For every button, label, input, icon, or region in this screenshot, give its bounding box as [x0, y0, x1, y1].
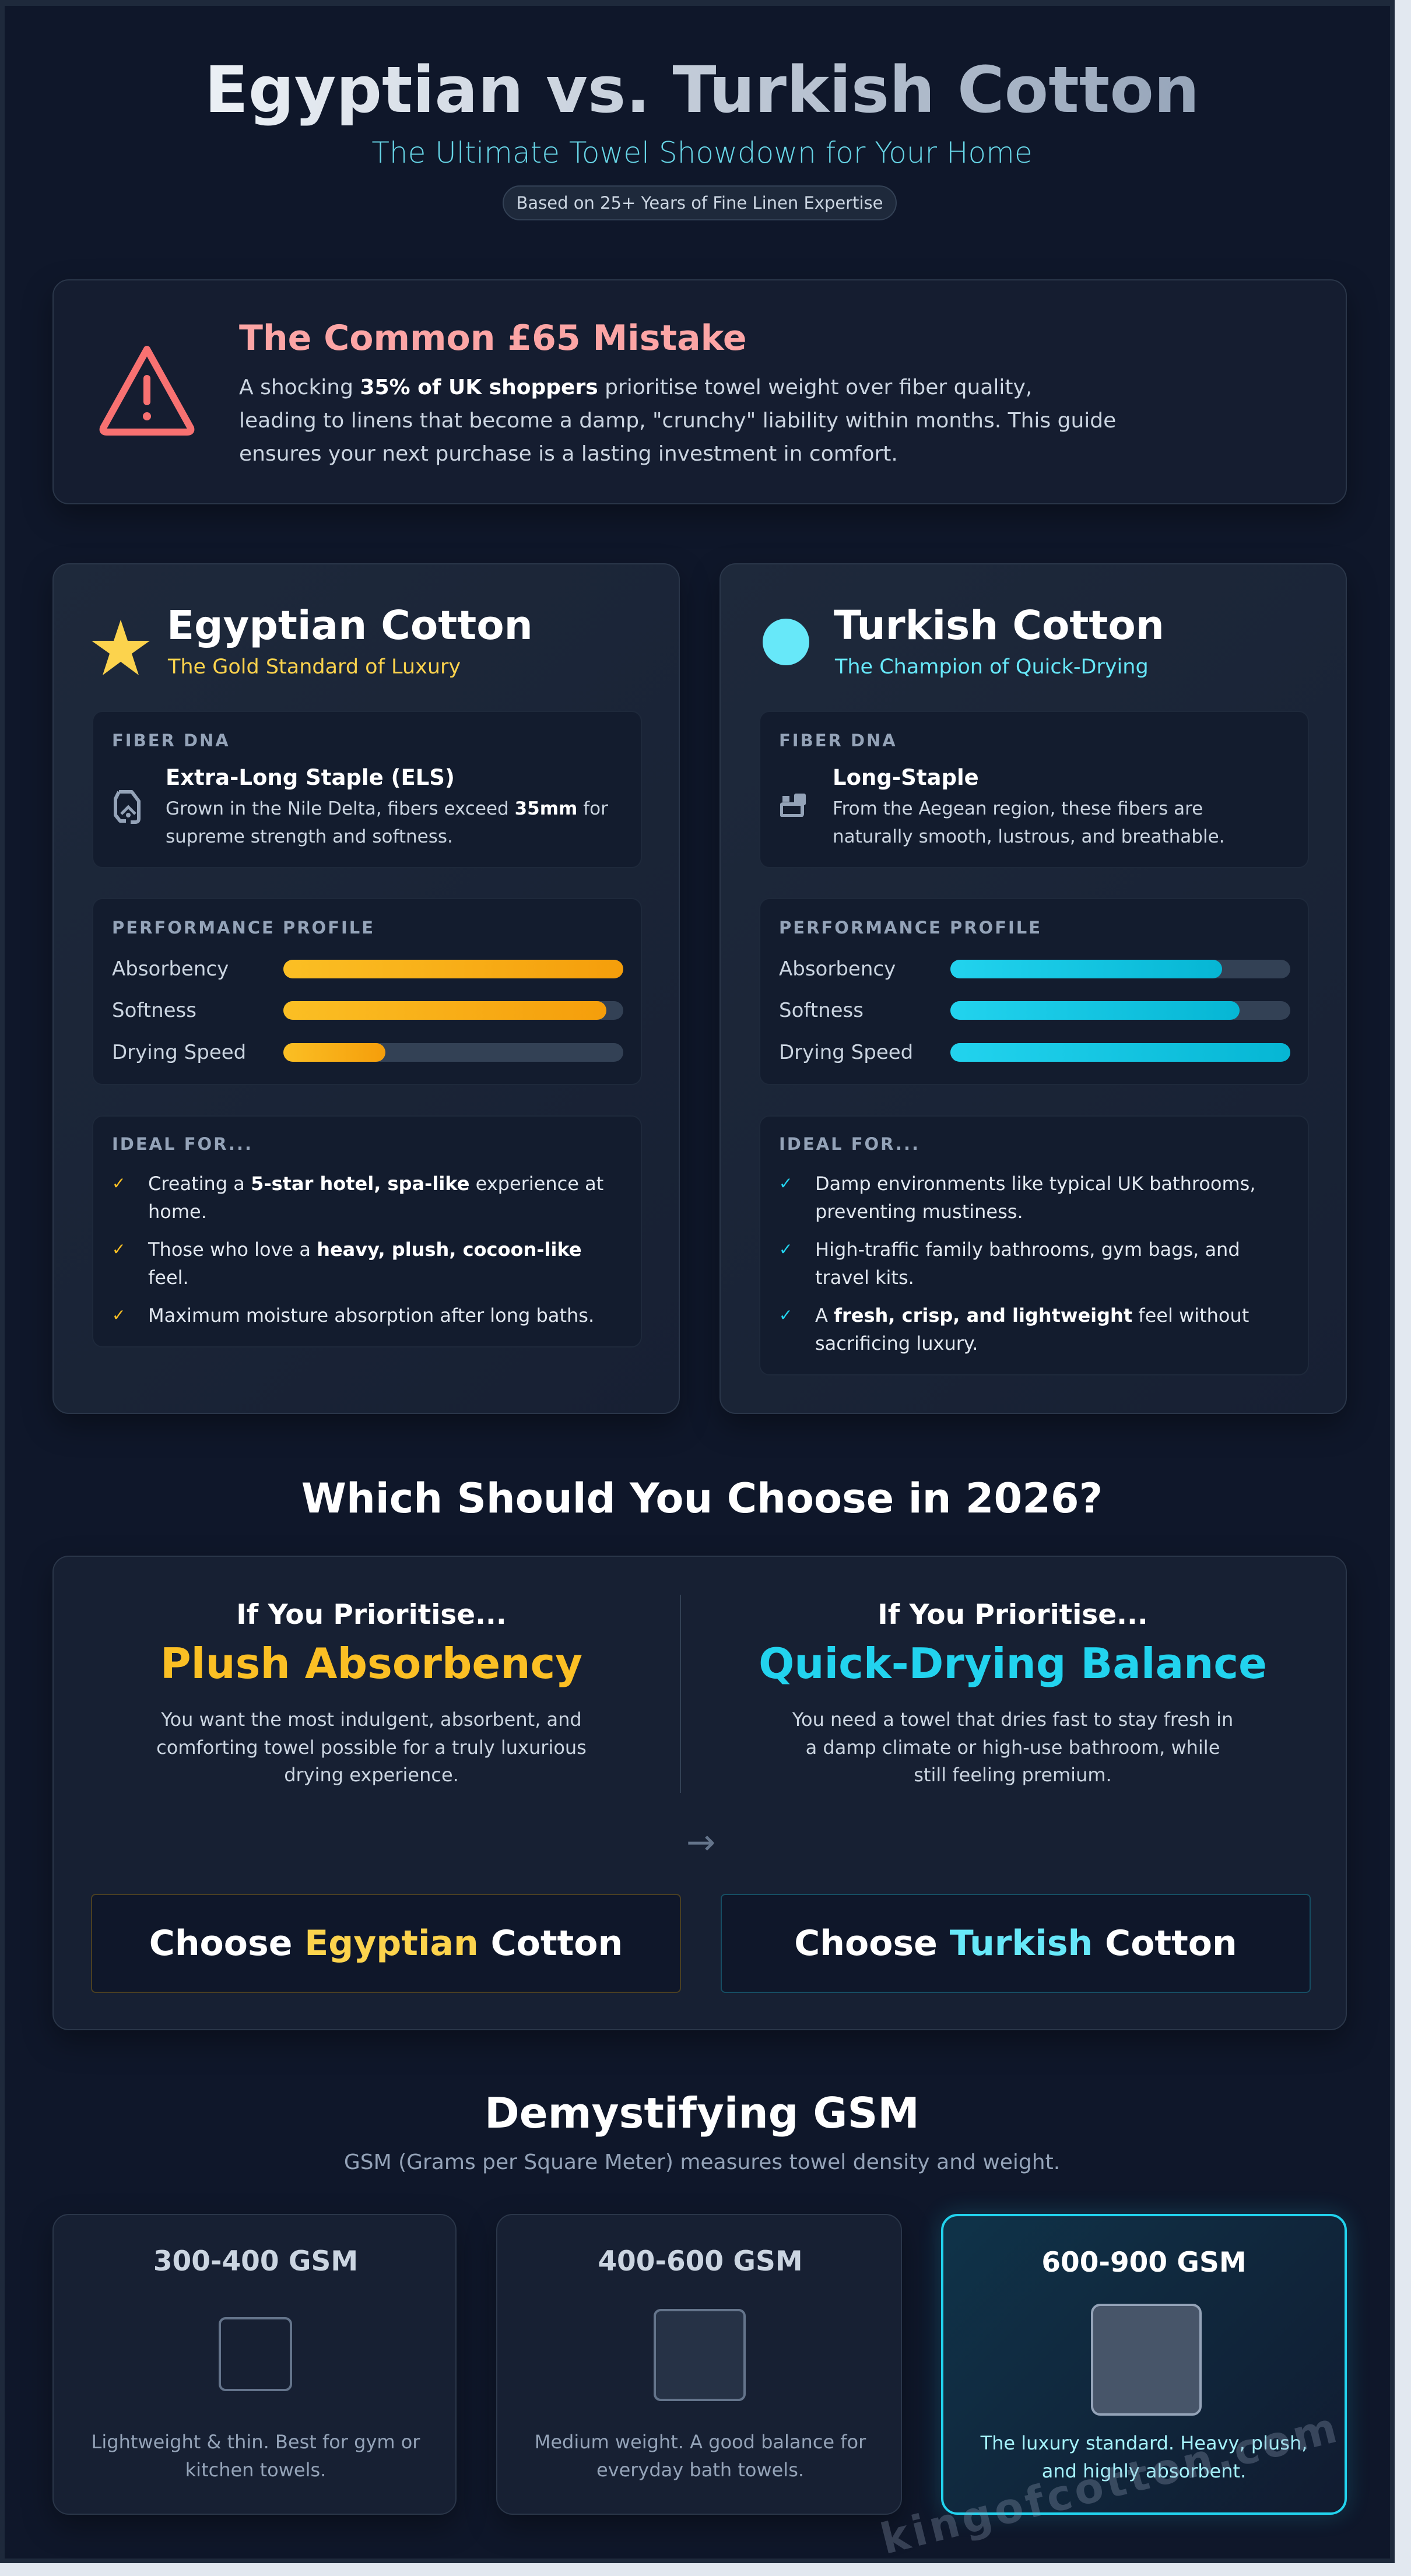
- watermark: kingofcotton.com: [876, 2402, 1345, 2564]
- ideal for list: Damp environments like typical UK bathrooms, preventing mustiness.: [815, 1173, 1255, 1223]
- body text: ensures your next purchase is a lasting investment in comfort.: [239, 442, 898, 466]
- heading: The Common £65 Mistake: [239, 318, 747, 359]
- subtitle: The Ultimate Towel Showdown for Your Home: [371, 136, 1033, 170]
- fiber DNA box: FIBER DNA: [779, 731, 897, 750]
- fiber DNA box: From the Aegean region, these fibers are: [833, 798, 1203, 819]
- ideal for list: ✓: [112, 1305, 125, 1325]
- title: Egyptian vs. Turkish Cotton: [205, 52, 1199, 127]
- icon: fiber: [114, 790, 141, 824]
- fiber DNA box: naturally smooth, lustrous, and breathable.: [833, 826, 1225, 847]
- fiber DNA box: [92, 711, 642, 868]
- ideal for list: Those who love a heavy, plush, cocoon-like feel.: [148, 1238, 582, 1289]
- button: Turkish: Choose Turkish Cotton: [794, 1923, 1237, 1964]
- ideal for list: IDEAL FOR...: [112, 1134, 253, 1154]
- right option: still feeling premium.: [914, 1764, 1112, 1786]
- performance bars: Drying Speed: [779, 1041, 913, 1064]
- ideal for list: ✓: [112, 1174, 125, 1193]
- right option: a damp climate or high-use bathroom, while: [806, 1736, 1220, 1759]
- performance bars: Softness: [779, 999, 864, 1022]
- body text: A shocking 35% of UK shoppers prioritise towel weight over fiber quality,: [239, 375, 1032, 399]
- badge: Based on 25+ Years of Fine Linen Expertise: [516, 193, 883, 213]
- performance bars: PERFORMANCE PROFILE: [112, 918, 375, 938]
- right option: If You Prioritise...: [878, 1599, 1148, 1631]
- divider: [680, 1595, 681, 1793]
- badge: [503, 185, 897, 220]
- ideal for list: A fresh, crisp, and lightweight feel without sacrificing luxury.: [815, 1304, 1249, 1354]
- performance bars: PERFORMANCE PROFILE: [779, 918, 1042, 938]
- panel: decision: [52, 1556, 1347, 2030]
- icon: thick towel: [1091, 2304, 1202, 2416]
- ideal for list: High-traffic family bathrooms, gym bags, and travel kits.: [815, 1238, 1240, 1289]
- ideal for list: Creating a 5-star hotel, spa-like experience at home.: [148, 1173, 603, 1223]
- button: Turkish: [721, 1894, 1311, 1993]
- GSM card 3 highlighted: 600-900 GSM: [1041, 2247, 1247, 2279]
- performance bars: [92, 898, 642, 1085]
- heading: which should you choose: Which Should You Choose in 2026?: [301, 1475, 1103, 1522]
- fiber DNA box: [759, 711, 1309, 868]
- tagline: The Champion of Quick-Drying: [835, 655, 1149, 679]
- GSM card 2: [496, 2214, 902, 2515]
- panel: Turkish cotton: [719, 563, 1347, 1414]
- ideal for list: [759, 1115, 1309, 1375]
- GSM card 2: 400-600 GSM: [598, 2245, 803, 2277]
- heading: GSM: Demystifying GSM: [485, 2089, 919, 2138]
- ideal for list: Maximum moisture absorption after long baths.: [148, 1304, 594, 1326]
- left option: You want the most indulgent, absorbent, and: [161, 1708, 582, 1731]
- ideal for list: IDEAL FOR...: [779, 1134, 920, 1154]
- GSM card 1: kitchen towels.: [185, 2459, 326, 2481]
- right option: Quick-Drying Balance: [759, 1639, 1267, 1688]
- ideal for list: ✓: [779, 1240, 792, 1259]
- fiber DNA box: Grown in the Nile Delta, fibers exceed 35mm for supreme strength and softness.: [166, 798, 608, 847]
- GSM card 3 highlighted: and highly absorbent.: [1042, 2460, 1246, 2482]
- fiber DNA box: Long-Staple: [833, 765, 979, 790]
- right option: You need a towel that dries fast to stay fresh in: [792, 1708, 1233, 1731]
- icon: medium towel: [654, 2309, 746, 2401]
- left option: comforting towel possible for a truly luxurious: [156, 1736, 587, 1759]
- GSM card 2: Medium weight. A good balance for: [535, 2431, 866, 2453]
- body text: leading to linens that become a damp, "crunchy" liability within months. This guide: [239, 409, 1116, 433]
- ideal for list: ✓: [779, 1174, 792, 1193]
- performance bars: Absorbency: [112, 957, 229, 981]
- icon: star: [92, 620, 150, 675]
- panel: common mistake: [52, 279, 1347, 504]
- GSM card 3 highlighted: [941, 2214, 1347, 2515]
- ideal for list: ✓: [779, 1305, 792, 1325]
- left option: If You Prioritise...: [236, 1599, 507, 1631]
- icon: cyan circle: [763, 619, 809, 665]
- fiber DNA box: Extra-Long Staple (ELS): [166, 765, 455, 790]
- performance bars: [759, 898, 1309, 1085]
- performance bars: Absorbency: [779, 957, 896, 981]
- icon: warning triangle: [99, 346, 195, 436]
- tagline: The Gold Standard of Luxury: [168, 655, 461, 679]
- fiber DNA box: FIBER DNA: [112, 731, 230, 750]
- icon: thin towel: [219, 2317, 292, 2391]
- body text: [239, 375, 1116, 466]
- icon: fiber stack: [780, 794, 806, 817]
- GSM subtitle: GSM (Grams per Square Meter) measures towel density and weight.: [344, 2150, 1060, 2174]
- GSM card 1: 300-400 GSM: [153, 2245, 358, 2277]
- right option: [759, 1599, 1267, 1786]
- button: Egyptian: Choose Egyptian Cotton: [149, 1923, 623, 1964]
- heading: Turkish Cotton: [834, 602, 1164, 649]
- left option: drying experience.: [284, 1764, 459, 1786]
- GSM card 2: everyday bath towels.: [596, 2459, 804, 2481]
- left option: [156, 1599, 587, 1786]
- performance bars: Drying Speed: [112, 1041, 246, 1064]
- left option: Plush Absorbency: [160, 1639, 582, 1688]
- ideal for list: ✓: [112, 1240, 125, 1259]
- GSM card 1: Lightweight & thin. Best for gym or: [92, 2431, 420, 2453]
- GSM card 1: [52, 2214, 457, 2515]
- performance bars: Softness: [112, 999, 196, 1022]
- heading: Egyptian Cotton: [167, 602, 533, 649]
- button: Egyptian: [91, 1894, 681, 1993]
- panel: Egyptian cotton: [52, 563, 680, 1414]
- GSM card 3 highlighted: The luxury standard. Heavy, plush,: [981, 2432, 1307, 2454]
- arrow: →: [686, 1822, 715, 1863]
- ideal for list: [92, 1115, 642, 1347]
